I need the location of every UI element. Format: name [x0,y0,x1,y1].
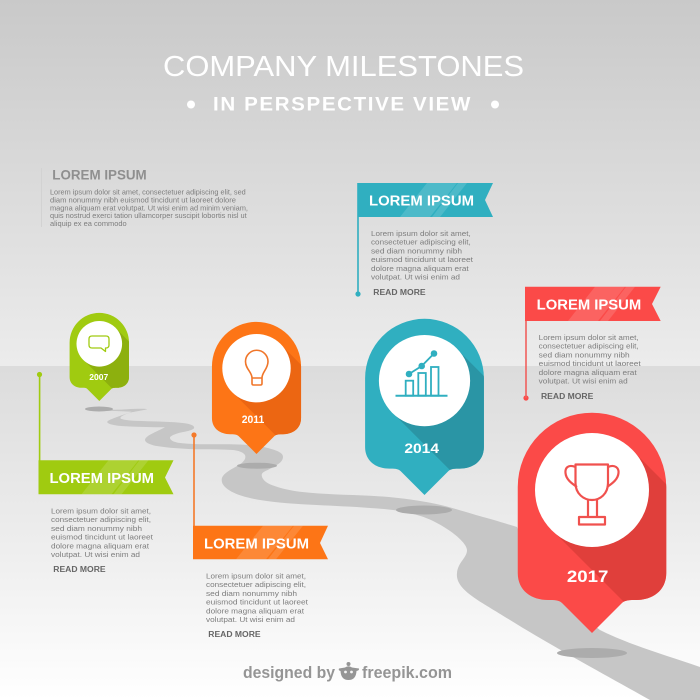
year 2007: 2007 [89,373,109,382]
intro text block: diam nonummy nibh euismod tincidunt ut laoreet dolore [50,196,236,204]
milestone: orange flag [191,432,328,639]
intro text block: magna aliquam erat volutpat. Ut wisi enim ad minim veniam, [50,203,248,212]
milestone: green flag [37,372,174,574]
milestone: orange flag: READ MORE [208,630,261,639]
milestone: red flag: volutpat. Ut wisi enim ad [539,377,628,386]
pin shadows [85,406,627,658]
milestone: teal flag: LOREM IPSUM [369,193,474,209]
milestone: orange flag: Lorem ipsum dolor sit amet, [206,571,306,580]
intro text block: quis nostrud exerci tation ullamcorper suscipit lobortis nisl ut [50,211,247,220]
intro text block: aliquip ex ea commodo [50,219,127,228]
milestone: orange flag: sed diam nonummy nibh [206,589,297,598]
subtitle: IN PERSPECTIVE VIEW [213,95,472,116]
milestone: teal flag: dolore magna aliquam erat [371,264,469,273]
pin: 2007 [70,312,129,401]
year 2014: 2014 [404,440,439,456]
milestone: teal flag: euismod tincidunt ut laoreet [371,255,473,264]
milestone: red flag [523,287,661,401]
footer credit [243,662,452,682]
intro text block: LOREM IPSUM [52,168,147,182]
milestone: teal flag [355,183,493,297]
milestone: green flag: consectetuer adipiscing elit, [51,515,151,524]
milestone: teal flag: sed diam nonummy nibh [371,246,462,255]
milestone: teal flag: volutpat. Ut wisi enim ad [371,272,460,282]
pin: 2011 [212,322,302,454]
milestone: red flag: euismod tincidunt ut laoreet [539,359,641,368]
milestone: green flag: euismod tincidunt ut laoreet [51,532,153,542]
milestone: green flag: Lorem ipsum dolor sit amet, [51,506,151,515]
icon: speech bubble [89,336,109,352]
milestone: teal flag: consectetuer adipiscing elit, [371,238,471,246]
milestone: green flag: dolore magna aliquam erat [51,541,149,550]
milestone: red flag: READ MORE [541,392,594,401]
milestone: red flag: consectetuer adipiscing elit, [539,342,639,351]
icon: light bulb [246,350,268,385]
footer credit: freepik.com [362,664,452,682]
milestone: teal flag: Lorem ipsum dolor sit amet, [371,229,471,238]
milestone: orange flag: volutpat. Ut wisi enim ad [206,615,295,624]
footer credit: designed by [243,664,336,682]
milestone: green flag: LOREM IPSUM [50,471,154,487]
milestone: red flag: LOREM IPSUM [537,298,641,314]
pin: 2014 [365,318,484,495]
icon: trophy [565,464,619,524]
pin: 2017 [518,412,666,633]
milestone: teal flag: READ MORE [373,288,426,297]
milestone: orange flag: dolore magna aliquam erat [206,606,304,615]
milestone: green flag: READ MORE [53,565,106,574]
winding road [85,407,700,700]
year 2017: 2017 [567,567,608,586]
year 2011: 2011 [242,414,264,426]
milestone: orange flag: euismod tincidunt ut laoreet [206,598,308,606]
milestone: red flag: dolore magna aliquam erat [539,368,637,377]
icon: bar chart [396,351,448,396]
milestone: green flag: sed diam nonummy nibh [51,524,142,533]
title: COMPANY MILESTONES [163,51,524,83]
milestone: green flag: volutpat. Ut wisi enim ad [51,550,140,559]
milestone: red flag: sed diam nonummy nibh [539,350,630,360]
milestone: orange flag: consectetuer adipiscing elit, [206,580,306,589]
icon: freepik logo [339,662,359,680]
intro text block [41,168,248,228]
intro text block: Lorem ipsum dolor sit amet, consectetuer adipiscing elit, sed [50,188,246,196]
milestone: red flag: Lorem ipsum dolor sit amet, [539,333,639,342]
milestone: orange flag: LOREM IPSUM [204,536,309,552]
